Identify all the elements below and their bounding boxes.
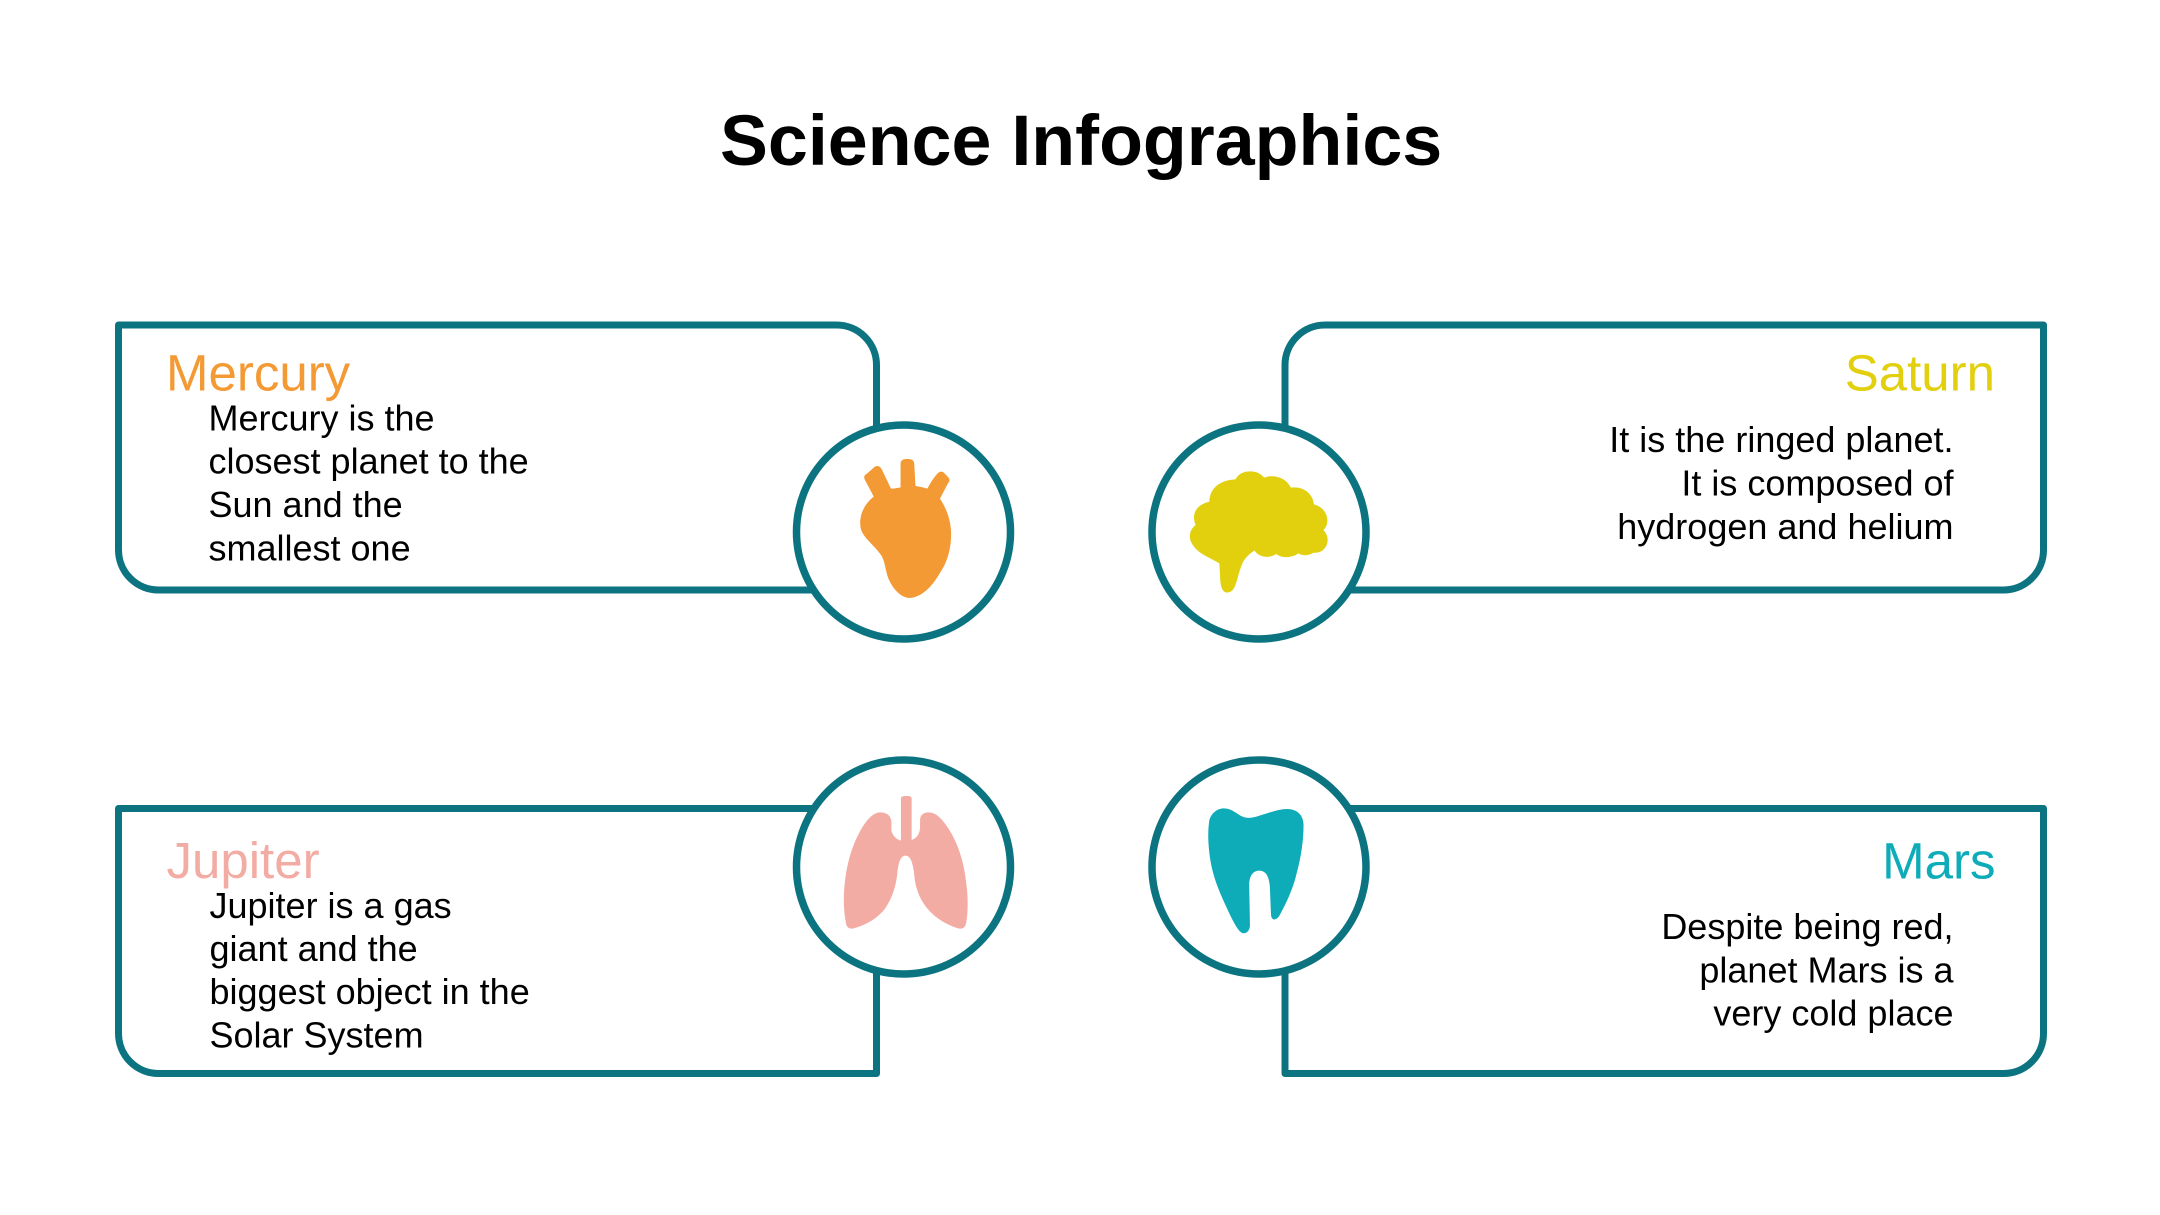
description: Mercury: closest planet to the: [208, 440, 529, 482]
heading: Jupiter: Jupiter: [166, 832, 320, 889]
icon ring: Mars: [1152, 760, 1366, 974]
icon: brain: [1190, 471, 1328, 593]
panel: Jupiter: [118, 760, 1010, 1074]
panel: Saturn: [1152, 325, 2044, 639]
description: Saturn: It is composed of: [1681, 462, 1954, 504]
description: Saturn: It is the ringed planet.: [1609, 419, 1954, 460]
description: Mercury: Sun and the: [208, 484, 403, 525]
card outline: Jupiter: [118, 808, 876, 1074]
icon: heart: [860, 459, 951, 598]
panel: Mercury: [118, 325, 1010, 639]
description: Jupiter: biggest object in the: [210, 971, 530, 1012]
heading: Mercury: Mercury: [166, 344, 351, 402]
icon ring: Saturn: [1152, 425, 1366, 639]
description: Jupiter: Solar System: [210, 1014, 424, 1056]
heading: Saturn: Saturn: [1845, 344, 1995, 402]
card outline: Mercury: [118, 325, 876, 590]
heading: Mars: Mars: [1882, 832, 1996, 890]
title: Science Infographics: [720, 101, 1442, 181]
description: Mars: planet Mars is a: [1699, 950, 1954, 990]
description: Jupiter: giant and the: [210, 928, 418, 969]
icon: tooth: [1208, 808, 1304, 933]
panel: Mars: [1152, 760, 2044, 1074]
description: Saturn: hydrogen and helium: [1617, 506, 1954, 547]
description: Mars: Despite being red,: [1661, 906, 1954, 947]
description: Mercury: Mercury is the: [208, 398, 435, 438]
description: Jupiter: Jupiter is a gas: [210, 885, 452, 926]
icon ring: Jupiter: [796, 760, 1010, 974]
icon ring: Mercury: [796, 425, 1010, 639]
description: Mercury: smallest one: [208, 528, 411, 568]
card outline: Mars: [1285, 808, 2044, 1074]
card outline: Saturn: [1285, 325, 2044, 590]
description: Mars: very cold place: [1713, 992, 1954, 1034]
icon: lungs: [844, 796, 968, 929]
